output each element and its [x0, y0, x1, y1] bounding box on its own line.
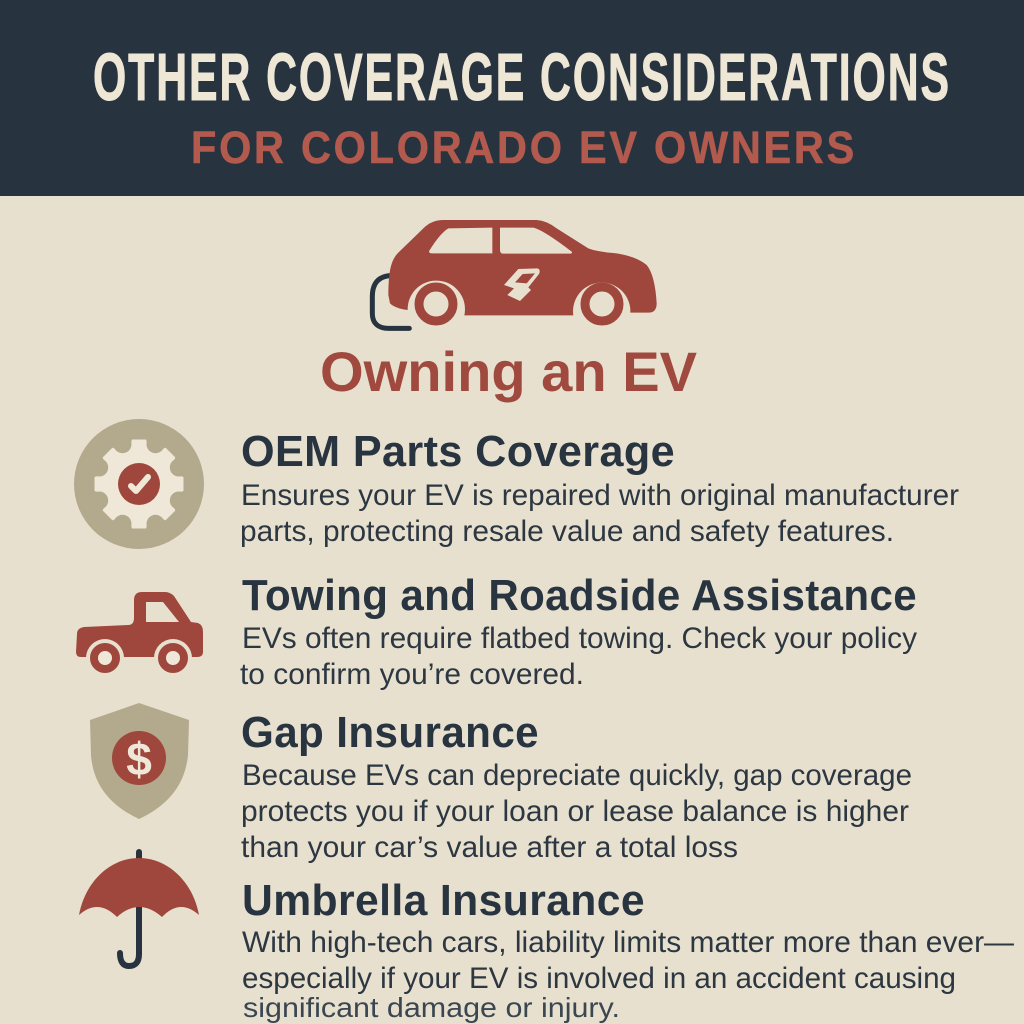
Umbrella Insurance description: significant damage or injury. — [243, 992, 620, 1023]
OEM Parts Coverage description: parts, protecting resale value and safety features. — [240, 515, 894, 548]
Gap Insurance description: Because EVs can depreciate quickly, gap coverage — [242, 759, 912, 792]
OEM Parts Coverage description — [240, 479, 959, 548]
Towing description: to confirm you’re covered. — [240, 658, 584, 691]
OEM Parts Coverage heading: OEM Parts Coverage — [241, 427, 675, 476]
Gap Insurance description: than your car’s value after a total loss — [241, 831, 738, 864]
header band — [0, 0, 1024, 196]
icon: shield with dollar sign: $ — [126, 733, 152, 785]
Umbrella Insurance description — [242, 926, 1014, 1023]
Umbrella Insurance description: especially if your EV is involved in an accident causing — [242, 962, 956, 995]
Gap Insurance description — [241, 759, 912, 864]
icon: gear with check mark — [74, 419, 204, 549]
icon: pickup truck — [76, 592, 203, 677]
Gap Insurance heading: Gap Insurance — [241, 708, 539, 757]
OEM Parts Coverage description: Ensures your EV is repaired with original manufacturer — [241, 479, 959, 512]
Towing and Roadside Assistance heading: Towing and Roadside Assistance — [242, 571, 917, 620]
heading: Owning an EV: Owning an EV — [320, 340, 697, 403]
Towing description — [240, 622, 917, 691]
Towing description: EVs often require flatbed towing. Check your policy — [242, 622, 917, 655]
Gap Insurance description: protects you if your loan or lease balance is higher — [241, 795, 909, 828]
icon: shield with dollar sign — [90, 703, 189, 819]
Umbrella Insurance description: With high-tech cars, liability limits matter more than ever— — [242, 926, 1014, 959]
Umbrella Insurance heading: Umbrella Insurance — [242, 876, 645, 925]
subtitle: FOR COLORADO EV OWNERS — [191, 122, 857, 173]
icon: umbrella — [79, 852, 199, 966]
icon: electric car with charging cable — [372, 220, 657, 328]
